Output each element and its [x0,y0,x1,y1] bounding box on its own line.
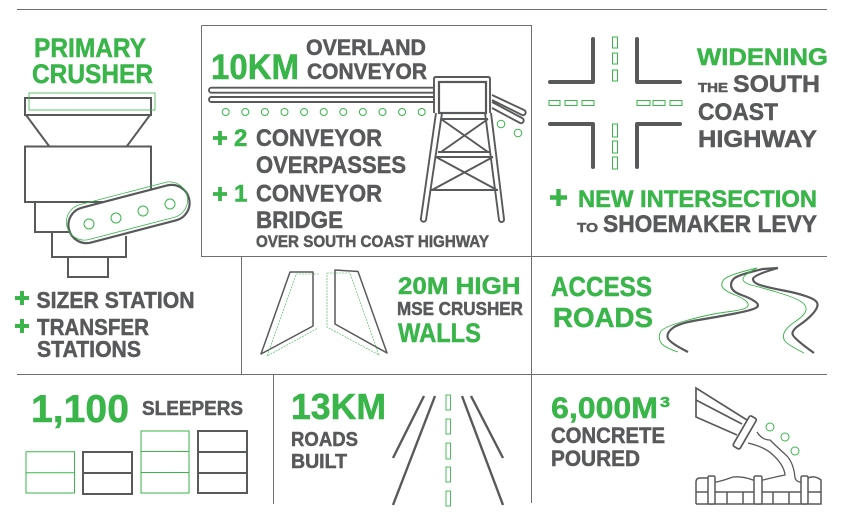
heading: access roads [551,271,653,333]
icon: crusher walls [261,270,387,356]
list: sizer and transfer stations [15,287,194,362]
text: conveyor overpasses and bridge: 2 [234,125,247,152]
text: 6,000m3 concrete poured: 3 [660,394,670,411]
text: 13km roads built [291,386,386,473]
heading: 10km overland conveyor [211,35,427,87]
text: 6,000m3 concrete poured: 6,000M [551,392,658,425]
icon: intersection [549,37,682,169]
text: conveyor overpasses and bridge: CONVEYOR [256,181,382,208]
heading: widening the south coast highway: HIGHWAY [698,126,817,153]
text: 6,000m3 concrete poured [551,392,670,471]
text: conveyor overpasses and bridge: BRIDGE [256,207,343,234]
icon: winding road [659,268,818,353]
heading: 10km overland conveyor: CONVEYOR [307,59,427,84]
heading: widening the south coast highway: SOUTH [733,71,820,98]
panel: concrete poured [551,388,821,504]
text: 20m high walls [397,273,523,348]
callout: new intersection: TO [577,220,598,235]
list: sizer and transfer stations: TRANSFER [37,314,149,340]
heading: primary crusher: CRUSHER [32,59,153,89]
text: conveyor overpasses and bridge: CONVEYOR [256,125,382,152]
heading: 10km overland conveyor: 10KM [211,48,299,87]
text: conveyor overpasses and bridge: OVERPASSES [256,152,406,179]
text: 13km roads built: ROADS [291,428,358,451]
icon: crusher machine [25,93,194,277]
text: 20m high walls: 20M HIGH [398,273,520,300]
text: conveyor overpasses and bridge: 1 [234,181,247,208]
text: conveyor overpasses and bridge: OVER SOUTH COAST HIGHWAY [256,232,490,251]
heading: primary crusher [32,33,153,89]
panel: mse crusher walls [261,270,523,356]
icon: conveyor tower [209,77,526,222]
text: 6,000m3 concrete poured: CONCRETE [551,423,665,448]
heading: widening the south coast highway: WIDENING [697,44,828,71]
heading: access roads: ROADS [553,302,653,333]
heading: widening the south coast highway [697,44,828,153]
text: 1,100 sleepers: SLEEPERS [142,398,243,420]
icon: concrete chute pouring [696,388,821,504]
text: conveyor overpasses and bridge [213,125,490,251]
text: 6,000m3 concrete poured: POURED [551,446,640,471]
text: 13km roads built: 13KM [291,386,386,427]
list: sizer and transfer stations: SIZER STATION [36,287,194,313]
panel: sleepers [26,388,247,494]
heading: 10km overland conveyor: OVERLAND [306,35,426,60]
heading: primary crusher: PRIMARY [34,33,146,63]
panel: overland conveyor [209,35,526,251]
callout: new intersection: SHOEMAKER LEVY [603,211,817,238]
heading: access roads: ACCESS [551,271,652,302]
text: 1,100 sleepers [31,388,243,431]
callout: new intersection [550,186,817,238]
heading: widening the south coast highway: COAST [698,99,778,126]
callout: new intersection: NEW INTERSECTION [578,186,817,213]
panel: south coast highway [549,37,828,238]
text: 20m high walls: MSE CRUSHER [397,298,523,319]
heading: widening the south coast highway: THE [698,81,728,95]
panel: access roads [551,268,818,353]
text: 20m high walls: WALLS [398,318,481,348]
panel: roads built [291,386,503,506]
text: 13km roads built: BUILT [291,450,347,473]
panel: primary crusher [15,33,194,362]
list: sizer and transfer stations: STATIONS [37,336,141,362]
icon: sleeper stacks [26,431,247,494]
text: 1,100 sleepers: 1,100 [31,388,129,431]
icon: road [393,395,503,506]
